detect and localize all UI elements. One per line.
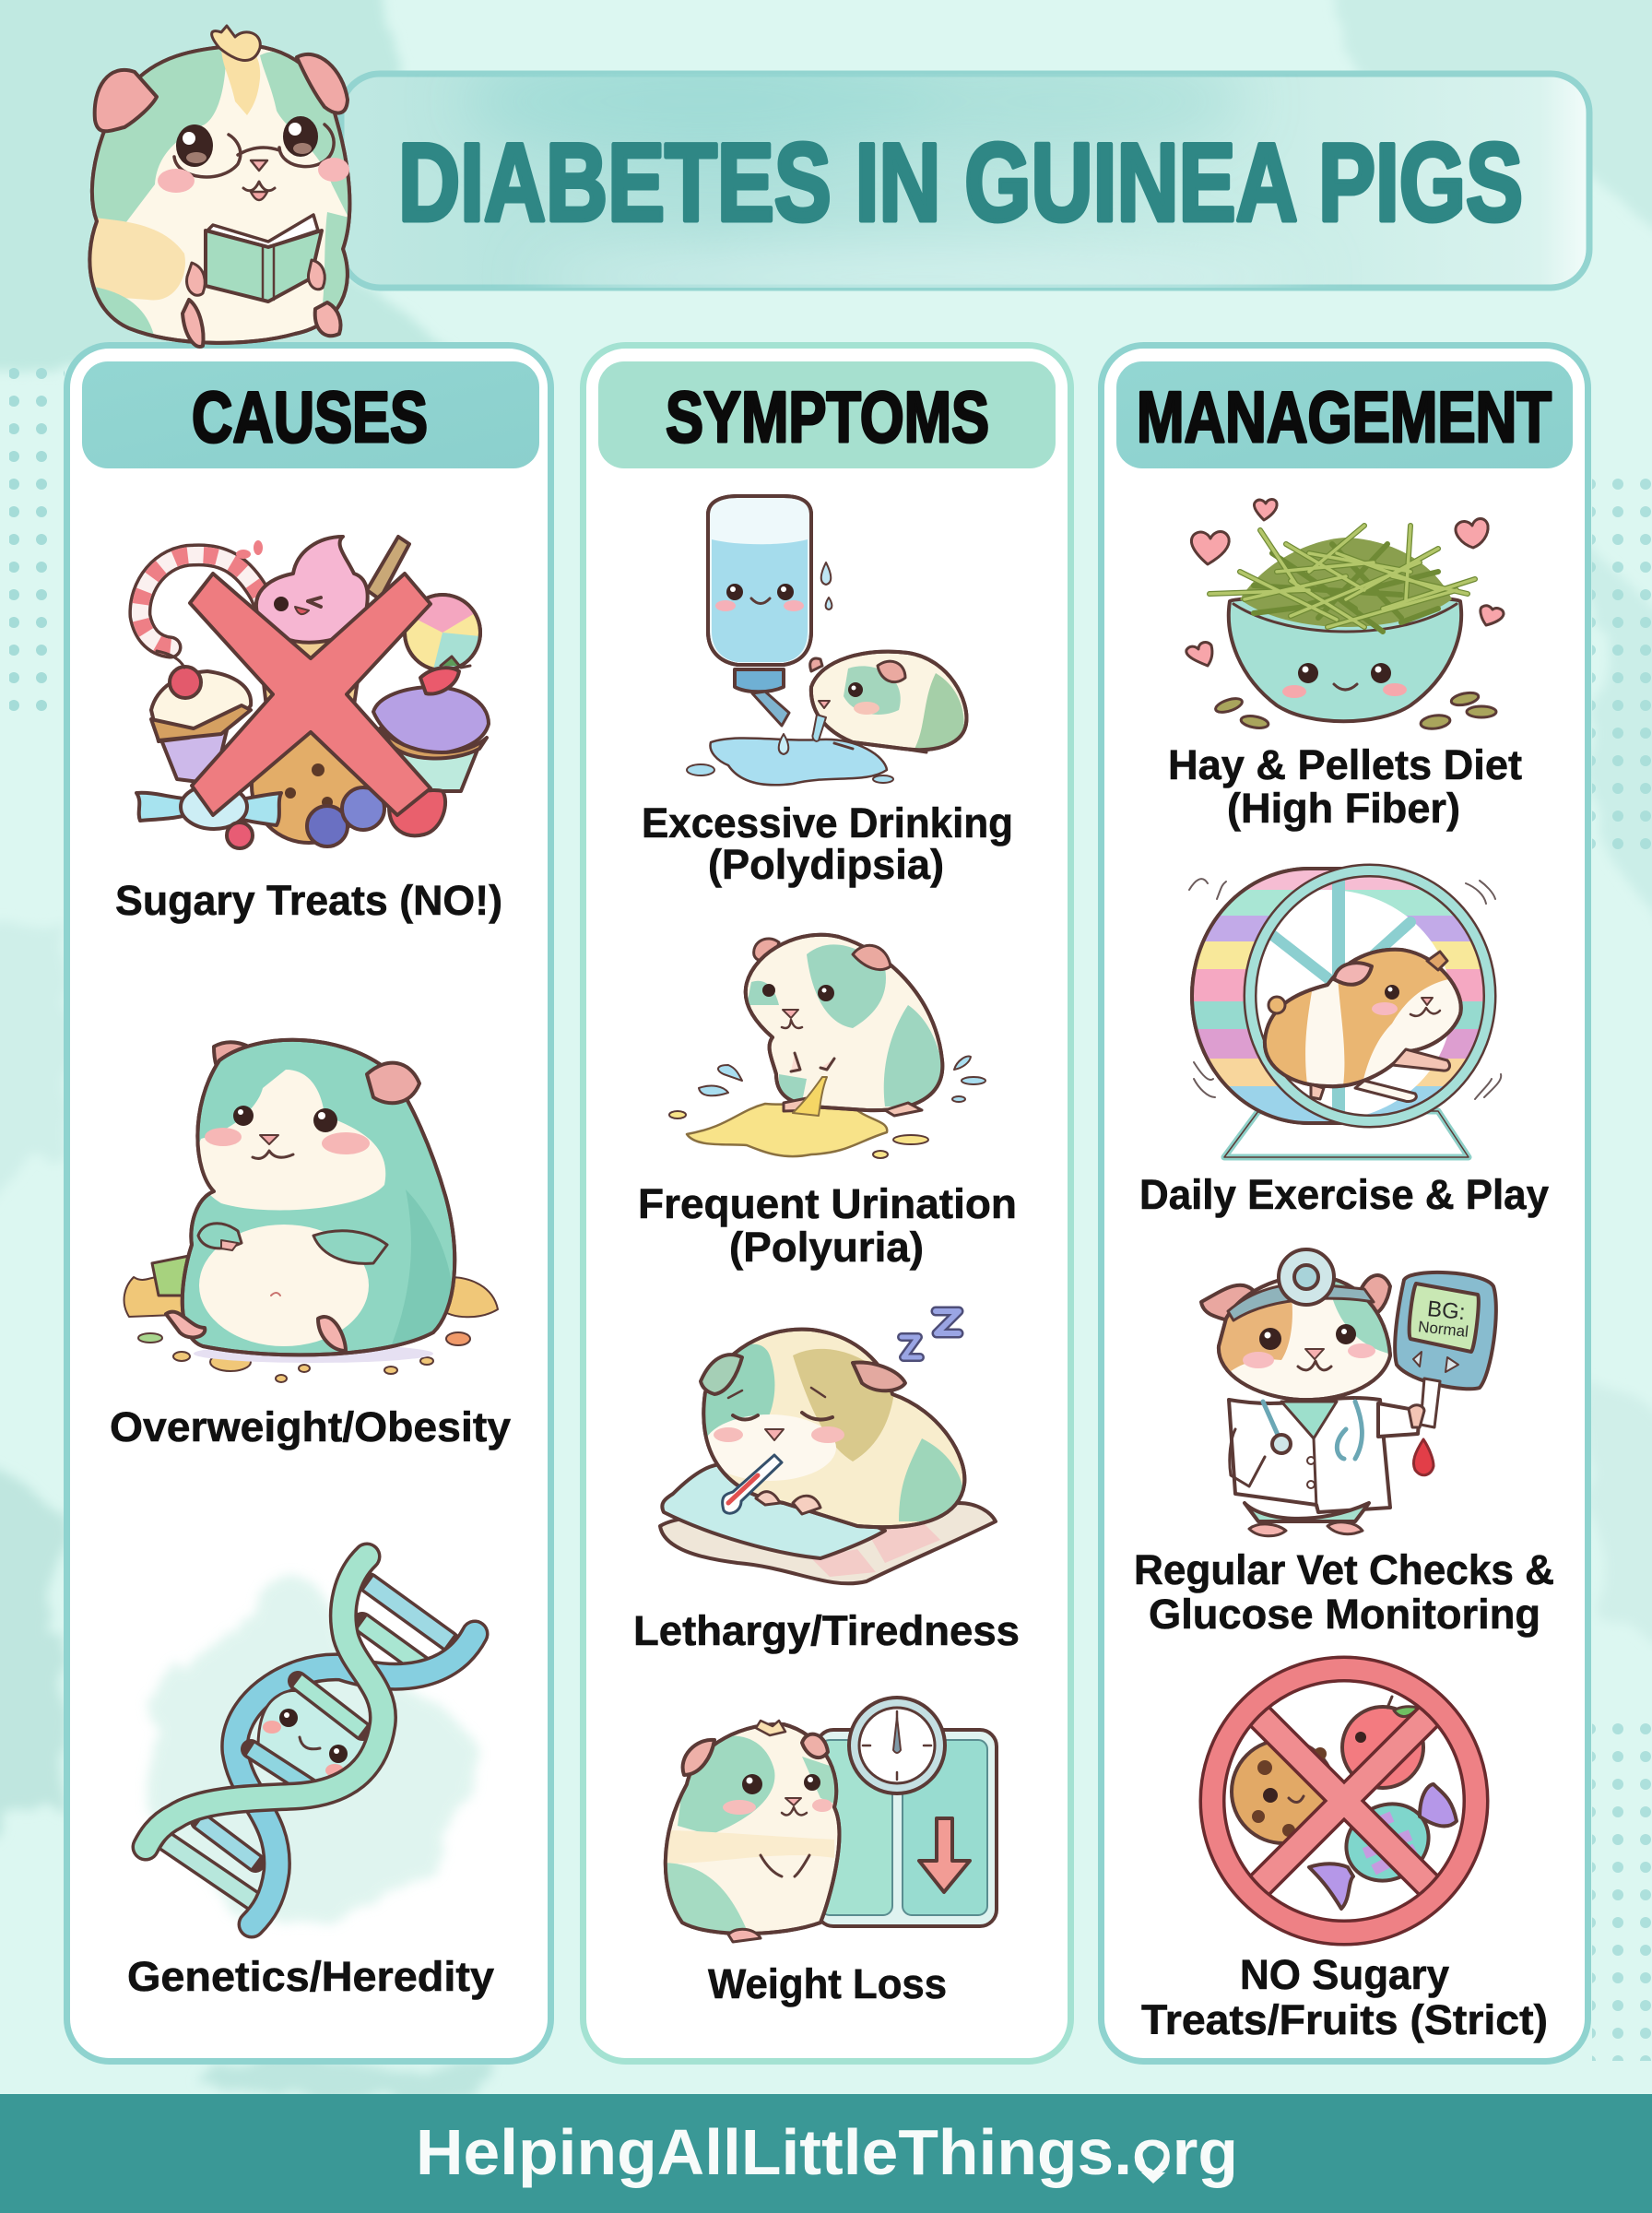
panel: management <box>1101 345 1587 2062</box>
heading: symptoms: SYMPTOMS <box>666 376 989 457</box>
icon: lethargic pig with thermometer <box>660 1311 996 1583</box>
label: vet checks: Glucose Monitoring <box>1149 1591 1540 1638</box>
label: excessive drinking <box>642 799 1013 888</box>
label: vet checks: Regular Vet Checks & <box>1134 1546 1554 1593</box>
icon: heart in the o <box>1141 2148 1165 2183</box>
label: no sugary treats <box>1141 1951 1548 2043</box>
mascot: guinea pig reading with glasses <box>83 26 364 350</box>
icon: overweight guinea pig <box>124 1040 498 1382</box>
label: lethargy: Lethargy/Tiredness <box>633 1607 1020 1654</box>
label: overweight: Overweight/Obesity <box>110 1403 511 1450</box>
icon: scale and thin pig <box>659 1698 997 1942</box>
label: frequent urination <box>638 1180 1017 1271</box>
label: hay and pellets: (High Fiber) <box>1227 785 1460 832</box>
label: hay and pellets: Hay & Pellets Diet <box>1168 741 1522 788</box>
heading: management: MANAGEMENT <box>1137 376 1552 457</box>
title banner <box>341 46 1589 304</box>
icon: frequent urination pig <box>669 935 985 1158</box>
label: weight loss: Weight Loss <box>708 1960 947 2007</box>
heading: management <box>1116 361 1573 468</box>
label: hay and pellets <box>1168 741 1522 832</box>
heading: causes <box>82 361 539 468</box>
label: excessive drinking: Excessive Drinking <box>642 799 1013 846</box>
label: sugary treats: Sugary Treats (NO!) <box>115 877 502 924</box>
label: no sugary treats: NO Sugary <box>1240 1951 1449 1998</box>
icon: exercise wheel with pig <box>1171 862 1512 1157</box>
footer bar <box>0 2094 1652 2213</box>
label: vet checks <box>1134 1546 1554 1638</box>
icon: water bottle and drinking pig <box>687 496 966 785</box>
icon: hay bowl with hearts <box>1186 500 1504 730</box>
footer text: HelpingAllLittleThings.org <box>416 2116 1238 2188</box>
icon: sugary treats crossed out <box>136 537 489 848</box>
label: excessive drinking: (Polydipsia) <box>708 841 944 888</box>
label: no sugary treats: Treats/Fruits (Strict) <box>1141 1996 1548 2043</box>
label: genetics: Genetics/Heredity <box>127 1953 494 2000</box>
icon: no sugar prohibition sign <box>1212 1669 1476 1933</box>
panel: symptoms <box>583 345 1071 2062</box>
decorative dot pattern: right upper <box>1592 477 1652 864</box>
causes card <box>66 345 551 2062</box>
symptoms card <box>583 345 1071 2062</box>
icon: vet pig with glucose meter <box>1201 1249 1496 1536</box>
management card <box>1101 345 1587 2062</box>
panel: causes <box>66 345 551 2062</box>
heading: symptoms <box>598 361 1056 468</box>
label: frequent urination: Frequent Urination <box>638 1180 1017 1227</box>
decorative dot pattern: left <box>9 353 65 713</box>
icon: vet pig with glucose meter: Normal <box>1417 1318 1469 1341</box>
icon: vet pig with glucose meter: BG: <box>1426 1296 1467 1325</box>
label: daily exercise: Daily Exercise & Play <box>1139 1171 1549 1218</box>
heading: causes: CAUSES <box>192 376 428 457</box>
decorative dot pattern: right lower <box>1592 1715 1652 2061</box>
label: frequent urination: (Polyuria) <box>729 1224 924 1271</box>
icon: DNA helix <box>143 1556 475 1924</box>
